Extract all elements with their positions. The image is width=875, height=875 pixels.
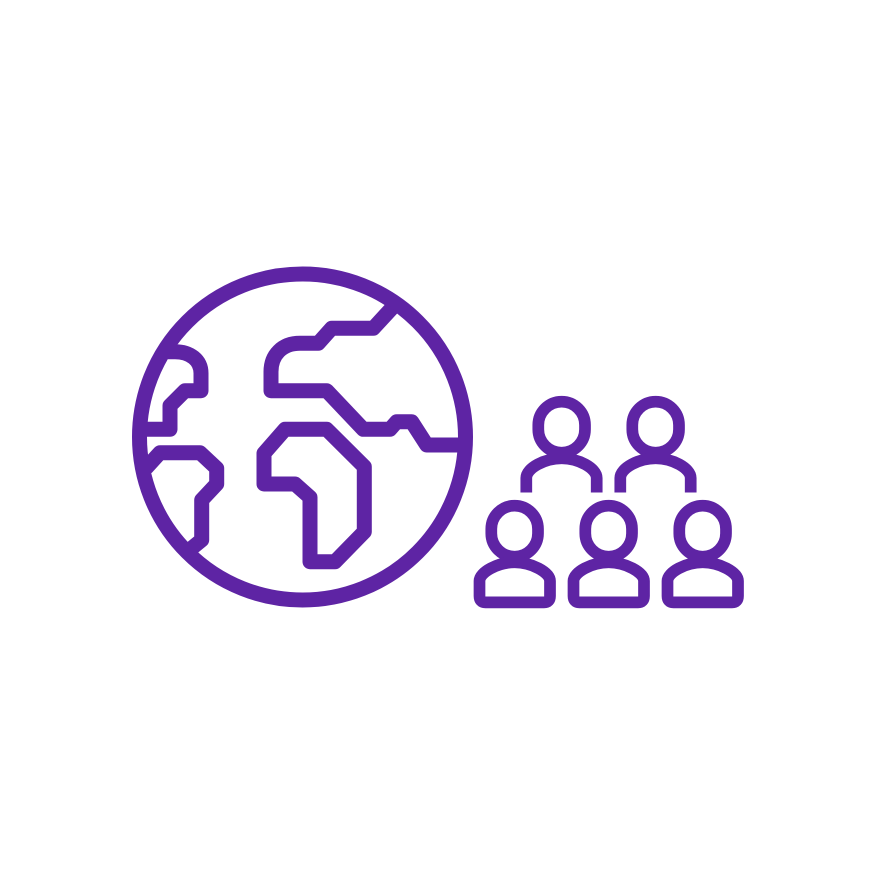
person: bottom row left xyxy=(480,506,550,602)
person: bottom row right xyxy=(668,506,738,602)
globe outline xyxy=(140,274,466,600)
icon: group of people xyxy=(480,402,738,602)
person: bottom row middle xyxy=(574,506,644,602)
person: top row left xyxy=(526,402,597,492)
continent: North America xyxy=(140,352,201,429)
continent: South America xyxy=(146,453,217,552)
icon: globe xyxy=(140,274,466,600)
continent: Africa xyxy=(264,429,364,562)
continent: Europe and Asia xyxy=(271,308,463,445)
person: top row right xyxy=(620,402,691,492)
